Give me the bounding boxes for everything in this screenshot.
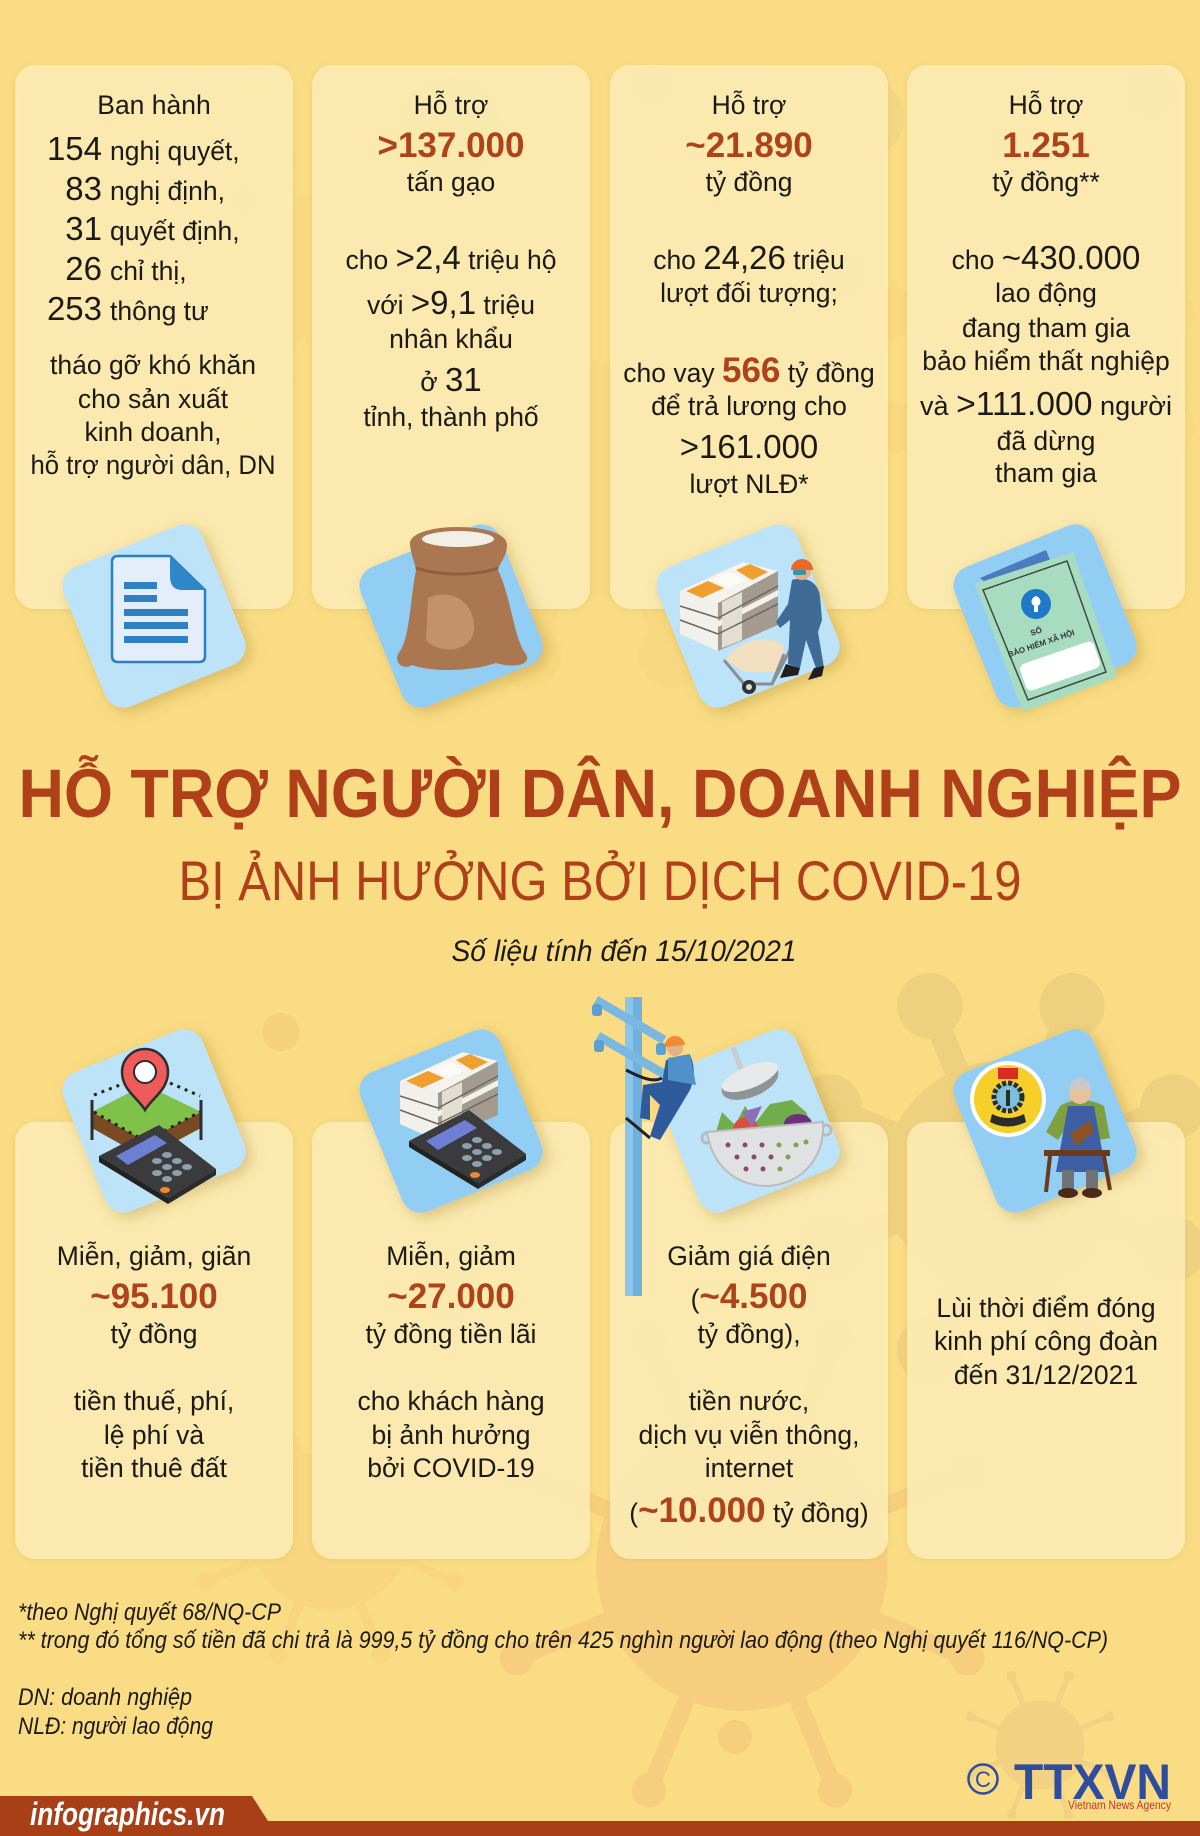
unit: tỷ đồng bbox=[111, 1319, 197, 1349]
heading: Miễn, giảm, giãn bbox=[57, 1241, 251, 1271]
description: internet bbox=[705, 1453, 794, 1483]
heading: Hỗ trợ bbox=[1009, 90, 1083, 120]
heading: Hỗ trợ bbox=[712, 90, 786, 120]
description: tham gia bbox=[995, 458, 1097, 488]
description: lệ phí và bbox=[104, 1420, 204, 1450]
panel: hỗ trợ bảo hiểm thất nghiệp bbox=[907, 65, 1185, 714]
description: dịch vụ viễn thông, bbox=[639, 1420, 859, 1450]
description: Lùi thời điểm đóng bbox=[936, 1293, 1156, 1323]
card background bbox=[312, 1122, 590, 1559]
subtitle: BỊ ẢNH HƯỞNG BỞI DỊCH COVID-19 bbox=[178, 849, 1022, 912]
icon: money and worker with wheelbarrow bbox=[650, 518, 846, 714]
legal documents list: 26 bbox=[65, 250, 102, 287]
background virus decoration bbox=[196, 65, 1194, 1819]
heading: Miễn, giảm bbox=[386, 1241, 516, 1271]
panel: ban hành văn bản bbox=[15, 65, 293, 714]
logo: TTXVN: Vietnam News Agency bbox=[1068, 1798, 1171, 1812]
description: bởi COVID-19 bbox=[367, 1453, 535, 1483]
unit: tấn gạo bbox=[407, 167, 495, 197]
icon: trade union logo and cobbler bbox=[947, 1023, 1143, 1219]
key number: ~95.100 bbox=[90, 1277, 218, 1316]
icon: money and calculator bbox=[353, 1023, 549, 1219]
legal documents list: 31 bbox=[65, 210, 102, 247]
card background bbox=[907, 65, 1185, 609]
description: tiền thuế, phí, bbox=[74, 1386, 234, 1416]
description: đến 31/12/2021 bbox=[954, 1360, 1138, 1390]
description: tháo gỡ khó khăn bbox=[50, 350, 256, 380]
date note: Số liệu tính đến 15/10/2021 bbox=[452, 935, 796, 968]
description: >161.000 bbox=[680, 428, 818, 465]
description: (~10.000 tỷ đồng) bbox=[629, 1491, 869, 1530]
key number: 1.251 bbox=[1002, 126, 1090, 165]
footnotes bbox=[18, 1599, 1108, 1740]
description: lượt NLĐ* bbox=[689, 469, 809, 499]
footnotes: DN: doanh nghiệp bbox=[18, 1684, 192, 1711]
unit: tỷ đồng tiền lãi bbox=[366, 1319, 536, 1349]
description: cho ~430.000 bbox=[952, 239, 1140, 276]
logo: TTXVN: C bbox=[975, 1767, 991, 1792]
heading: Giảm giá điện bbox=[667, 1241, 831, 1271]
legal documents list bbox=[47, 130, 240, 327]
icon: social insurance book bbox=[947, 518, 1143, 714]
footnotes: *theo Nghị quyết 68/NQ-CP bbox=[18, 1599, 281, 1626]
description: cho 24,26 triệu bbox=[653, 239, 845, 276]
description bbox=[920, 239, 1172, 488]
description bbox=[357, 1386, 545, 1483]
description: cho vay 566 tỷ đồng bbox=[623, 351, 875, 390]
description: đang tham gia bbox=[962, 313, 1130, 343]
icon: social insurance book: SỐ bbox=[1029, 625, 1043, 638]
description: đã dừng bbox=[997, 426, 1095, 456]
footnotes: NLĐ: người lao động bbox=[18, 1713, 214, 1740]
description: lượt đối tượng; bbox=[660, 278, 838, 308]
panel: miễn giảm tiền lãi bbox=[312, 1023, 590, 1559]
unit: tỷ đồng), bbox=[697, 1319, 801, 1349]
icon: shower and colander bbox=[650, 1023, 846, 1219]
unit: tỷ đồng bbox=[706, 167, 792, 197]
description: kinh doanh, bbox=[84, 417, 222, 447]
icon: electric pole with worker bbox=[592, 997, 696, 1296]
description: hỗ trợ người dân, DN bbox=[30, 450, 276, 480]
panel: hỗ trợ tỷ đồng bbox=[610, 65, 888, 714]
description: tiền thuê đất bbox=[81, 1453, 228, 1483]
description: cho sản xuất bbox=[78, 384, 229, 414]
description bbox=[74, 1386, 234, 1483]
key number: >137.000 bbox=[378, 126, 524, 165]
heading: Hỗ trợ bbox=[414, 90, 488, 120]
legal documents list: 253 bbox=[47, 290, 102, 327]
description: kinh phí công đoàn bbox=[934, 1326, 1158, 1356]
icon: social insurance book: BẢO HIỂM XÃ HỘI bbox=[1007, 628, 1076, 659]
description: tỉnh, thành phố bbox=[363, 402, 539, 432]
legal documents list: 154 bbox=[47, 130, 102, 167]
card background bbox=[907, 1122, 1185, 1559]
panel: miễn giảm thuế bbox=[15, 1023, 293, 1559]
description: ở 31 bbox=[420, 361, 482, 398]
description bbox=[629, 1386, 869, 1530]
card background bbox=[610, 65, 888, 609]
legal documents list: chỉ thị, bbox=[110, 256, 187, 286]
description: để trả lương cho bbox=[651, 391, 847, 421]
key number: (~4.500 bbox=[691, 1277, 807, 1316]
icon: land plot with location pin and calculator bbox=[56, 1023, 252, 1219]
description: tiền nước, bbox=[689, 1386, 809, 1416]
logo: TTXVN: TTXVN bbox=[1014, 1754, 1171, 1810]
description bbox=[623, 239, 875, 499]
icon: rice sack bbox=[353, 518, 549, 714]
card background bbox=[610, 1122, 888, 1559]
legal documents list: nghị quyết, bbox=[110, 136, 240, 166]
panel: giảm giá điện nước bbox=[592, 997, 888, 1559]
panel: hỗ trợ gạo bbox=[312, 65, 590, 714]
card background bbox=[15, 65, 293, 609]
heading: Ban hành bbox=[97, 90, 211, 120]
panel: kinh phí công đoàn bbox=[907, 1023, 1185, 1559]
key number: ~21.890 bbox=[685, 126, 813, 165]
description: với >9,1 triệu bbox=[367, 284, 535, 321]
brand: infographics.vn bbox=[30, 1796, 225, 1832]
legal documents list: 83 bbox=[65, 170, 102, 207]
footer band bbox=[0, 1796, 1200, 1836]
card background bbox=[312, 65, 590, 609]
legal documents list: quyết định, bbox=[110, 216, 240, 246]
legal documents list: thông tư bbox=[110, 296, 209, 326]
description: cho >2,4 triệu hộ bbox=[345, 239, 557, 276]
card background bbox=[15, 1122, 293, 1559]
description bbox=[934, 1293, 1158, 1390]
unit: tỷ đồng** bbox=[992, 167, 1100, 197]
legal documents list: nghị định, bbox=[110, 176, 225, 206]
description: bảo hiểm thất nghiệp bbox=[922, 346, 1170, 376]
icon: document bbox=[56, 518, 252, 714]
description bbox=[30, 350, 276, 480]
description: cho khách hàng bbox=[357, 1386, 545, 1416]
description: nhân khẩu bbox=[389, 324, 513, 354]
description: lao động bbox=[995, 278, 1097, 308]
description: và >111.000 người bbox=[920, 385, 1172, 422]
key number: ~27.000 bbox=[387, 1277, 515, 1316]
description bbox=[345, 239, 557, 432]
description: bị ảnh hưởng bbox=[372, 1420, 530, 1450]
